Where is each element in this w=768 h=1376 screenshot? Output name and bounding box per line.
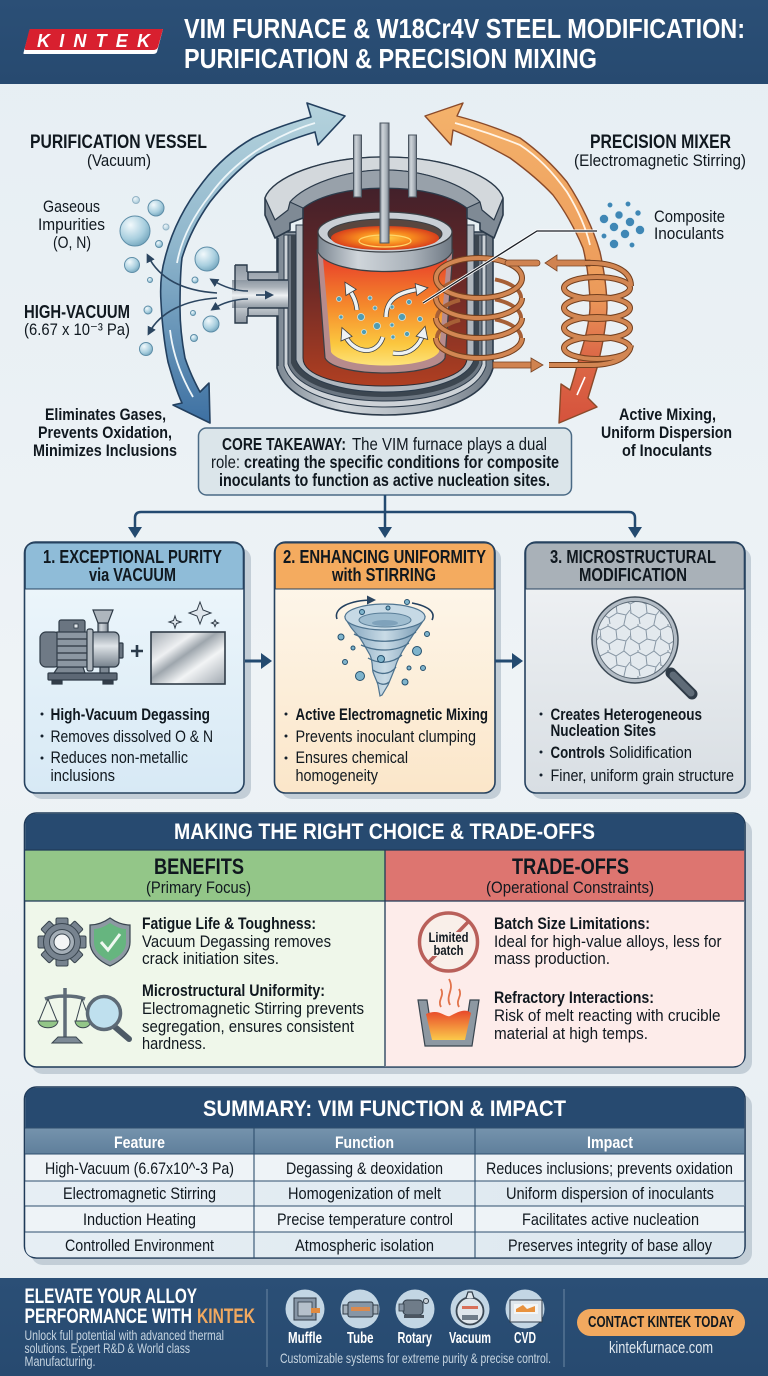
callout: core takeaway: inoculants to function as active nucleation sites. (219, 470, 550, 490)
footer heading: PERFORMANCE WITH (24, 1305, 192, 1328)
label: gaseous impurities (38, 197, 105, 252)
icon: vacuum furnace (450, 1290, 490, 1328)
icon: limited batch: Limited (428, 930, 468, 945)
label: eliminates gases (33, 405, 177, 460)
panel: enhancing uniformity (274, 542, 501, 799)
benefits heading: (Primary Focus) (146, 878, 251, 897)
arrow: purification cycle (161, 103, 345, 423)
icon: vacuum pump (40, 610, 123, 684)
port arrow (256, 294, 271, 296)
bullets (40, 706, 213, 785)
label: active mixing: Uniform Dispersion (601, 423, 732, 442)
table row: electromagnetic stirring: Homogenization of melt (288, 1184, 441, 1203)
bullets (284, 706, 488, 785)
product labels (288, 1330, 536, 1347)
callout: core takeaway: CORE TAKEAWAY: (222, 434, 346, 454)
table row: controlled environment: Controlled Environment (65, 1236, 214, 1255)
label: active mixing: of Inoculants (622, 441, 712, 460)
panel: microstructural modification (525, 542, 751, 799)
trade-offs heading: TRADE-OFFS (512, 854, 629, 879)
icon: composite inoculants (600, 201, 644, 248)
footer description: Manufacturing. (24, 1353, 96, 1369)
icon: rotary furnace (396, 1290, 434, 1328)
bullets: Creates Heterogeneous (550, 706, 702, 724)
inoculant particles in melt (336, 296, 422, 339)
heading: 3. MICROSTRUCTURAL (550, 546, 716, 567)
callout line (423, 231, 597, 303)
bullets: Prevents inoculant clumping (296, 728, 476, 746)
heading: MODIFICATION (579, 564, 687, 585)
icon: scales and magnifier (38, 988, 129, 1043)
benefits heading (146, 854, 251, 897)
arrow: step 2 to 3 (495, 653, 523, 669)
product labels: CVD (514, 1330, 536, 1347)
website: kintekfurnace.com (609, 1339, 713, 1357)
icon: limited batch: batch (434, 943, 464, 958)
panel: summary table (24, 1087, 752, 1265)
table row: electromagnetic stirring: Electromagnetic Stirring (63, 1184, 216, 1203)
footer (0, 1278, 768, 1376)
footer description: Unlock full potential with advanced thermal (24, 1327, 224, 1343)
table row: high-vacuum (45, 1159, 733, 1178)
icon: CVD furnace (506, 1290, 544, 1328)
benefits heading: BENEFITS (154, 854, 244, 879)
trade-offs heading (486, 854, 654, 897)
induction coil right (549, 263, 631, 365)
products caption: Customizable systems for extreme purity & precise control. (280, 1350, 551, 1366)
header band (0, 0, 768, 84)
trade-off text: mass production. (494, 949, 610, 968)
button: contact (577, 1309, 745, 1336)
title (184, 13, 745, 74)
product labels: Muffle (288, 1330, 322, 1347)
icon: shield (90, 918, 130, 966)
callout: core takeaway: creating the specific conditions for composite (244, 452, 559, 472)
product labels: Tube (347, 1330, 374, 1347)
table row: induction heating: Facilitates active nucleation (522, 1210, 699, 1229)
bullets: inclusions (50, 767, 115, 785)
label: eliminates gases: Minimizes Inclusions (33, 441, 177, 460)
footer heading: KINTEK (197, 1305, 255, 1328)
bullets: Reduces non-metallic (50, 749, 188, 767)
table row: controlled environment: Atmospheric isolation (295, 1236, 434, 1255)
label: precision mixer: PRECISION MIXER (590, 132, 731, 153)
label: composite inoculants: Inoculants (654, 224, 724, 243)
gas extraction arrows (148, 256, 248, 333)
logo: KINTEK: KINTEK (37, 31, 152, 51)
heading (283, 546, 487, 585)
bullets: Finer, uniform grain structure (550, 767, 734, 785)
bullets: homogeneity (296, 767, 379, 785)
product labels: Rotary (398, 1330, 432, 1347)
table header row: Function (335, 1133, 394, 1152)
electrode rods (380, 123, 389, 243)
table header row (114, 1133, 633, 1152)
label: precision mixer: (Electromagnetic Stirring) (574, 151, 746, 170)
label: gaseous impurities: Gaseous (43, 197, 100, 216)
icon: limited batch (420, 913, 478, 971)
arrow: step 1 to 2 (245, 653, 272, 669)
label: high-vacuum: HIGH-VACUUM (24, 302, 130, 322)
label: gaseous impurities: (O, N) (53, 233, 91, 252)
plus sign (131, 645, 143, 657)
icon: crucible with flames (418, 979, 479, 1046)
arrow: mixing cycle (425, 103, 607, 423)
trade-off text: Ideal for high-value alloys, less for (494, 932, 722, 951)
bullets: Removes dissolved O & N (50, 728, 213, 746)
trade-offs heading: (Operational Constraints) (486, 878, 654, 897)
table row: electromagnetic stirring (63, 1184, 714, 1203)
heading (43, 546, 223, 585)
trade-off text: Batch Size Limitations: (494, 914, 650, 933)
trade-off text (494, 914, 722, 1043)
bullets: Ensures chemical (296, 749, 408, 767)
table row: electromagnetic stirring: Uniform dispersion of inoculants (506, 1184, 714, 1203)
bullets: Nucleation Sites (550, 722, 656, 740)
bullets: Active Electromagnetic Mixing (296, 706, 488, 724)
label: high-vacuum: (6.67 x 10⁻³ Pa) (24, 320, 130, 339)
label: eliminates gases: Eliminates Gases, (45, 405, 166, 424)
crucible wall (317, 250, 453, 373)
melt (323, 258, 447, 366)
trade-off text: Risk of melt reacting with crucible (494, 1006, 720, 1025)
induction coil near furnace (436, 258, 522, 358)
panel: making the right choice (24, 813, 752, 1074)
coil back arcs (437, 279, 521, 338)
benefit text: hardness. (142, 1034, 206, 1053)
furnace illustration (232, 123, 503, 415)
table row: high-vacuum: High-Vacuum (6.67x10^-3 Pa) (45, 1159, 234, 1178)
icon: polished plate with sparkles (151, 602, 225, 684)
benefit text: Electromagnetic Stirring prevents (142, 999, 364, 1018)
bullets (540, 706, 734, 785)
vacuum port (232, 238, 288, 366)
benefit text: Microstructural Uniformity: (142, 981, 325, 1000)
heading: with STIRRING (331, 564, 436, 585)
heading: SUMMARY: VIM FUNCTION & IMPACT (203, 1096, 566, 1121)
furnace lid (265, 157, 503, 238)
benefit text: crack initiation sites. (142, 949, 279, 968)
label: high-vacuum (24, 302, 130, 339)
icon: tube furnace (340, 1290, 380, 1328)
label: active mixing: Active Mixing, (619, 405, 716, 424)
table row: induction heating (83, 1210, 699, 1229)
footer heading: ELEVATE YOUR ALLOY (24, 1285, 197, 1308)
trade-off text: Refractory Interactions: (494, 988, 654, 1007)
label: gaseous impurities: Impurities (38, 215, 105, 234)
icon: gas bubbles (120, 196, 219, 356)
heading: MAKING THE RIGHT CHOICE & TRADE-OFFS (174, 819, 595, 844)
label: precision mixer (574, 132, 746, 170)
table row: controlled environment (65, 1236, 712, 1255)
title: PURIFICATION & PRECISION MIXING (184, 43, 597, 74)
icon: tornado (336, 600, 433, 696)
stirring arrows (345, 289, 423, 354)
benefit text: Vacuum Degassing removes (142, 932, 331, 951)
table row: controlled environment: Preserves integrity of base alloy (508, 1236, 712, 1255)
heading: 2. ENHANCING UNIFORMITY (283, 546, 487, 567)
label: purification vessel (30, 132, 207, 170)
callout: core takeaway (198, 428, 572, 495)
logo: KINTEK (24, 29, 163, 54)
benefit text: Fatigue Life & Toughness: (142, 914, 316, 933)
icon: muffle furnace (286, 1290, 324, 1328)
connector arrows to cards (128, 495, 642, 538)
heading: 1. EXCEPTIONAL PURITY (43, 546, 223, 567)
label: purification vessel: (Vacuum) (87, 151, 151, 170)
heading (550, 546, 716, 585)
table header row: Impact (587, 1133, 633, 1152)
icon: gear (38, 918, 86, 966)
callout: core takeaway: role: (211, 452, 240, 472)
bullets: Solidification (609, 744, 692, 762)
label: composite inoculants: Composite (654, 207, 725, 226)
panel: exceptional purity (24, 542, 251, 799)
benefit text: segregation, ensures consistent (142, 1017, 354, 1036)
furnace interior (303, 186, 467, 386)
furnace outer body (277, 232, 493, 415)
coil leads (493, 255, 590, 372)
label: composite inoculants (654, 207, 725, 243)
table header row: Feature (114, 1133, 165, 1152)
product labels: Vacuum (449, 1330, 491, 1347)
label: active mixing (601, 405, 732, 460)
table row: induction heating: Precise temperature control (277, 1210, 453, 1229)
label: eliminates gases: Prevents Oxidation, (38, 423, 172, 442)
label: purification vessel: PURIFICATION VESSEL (30, 132, 207, 153)
icon: magnifier over grain structure (592, 597, 692, 694)
footer heading (24, 1285, 255, 1328)
trade-off text: material at high temps. (494, 1024, 648, 1043)
footer description: solutions. Expert R&D & World class (24, 1340, 190, 1356)
bullets: Controls (550, 744, 605, 762)
crucible rim (318, 232, 452, 272)
heading: via VACUUM (89, 564, 176, 585)
benefit text (142, 914, 364, 1053)
table row: induction heating: Induction Heating (83, 1210, 196, 1229)
callout: core takeaway: The VIM furnace plays a dual (352, 434, 547, 454)
table row: high-vacuum: Degassing & deoxidation (286, 1159, 443, 1178)
footer description (24, 1327, 224, 1369)
bullets: High-Vacuum Degassing (50, 706, 210, 724)
